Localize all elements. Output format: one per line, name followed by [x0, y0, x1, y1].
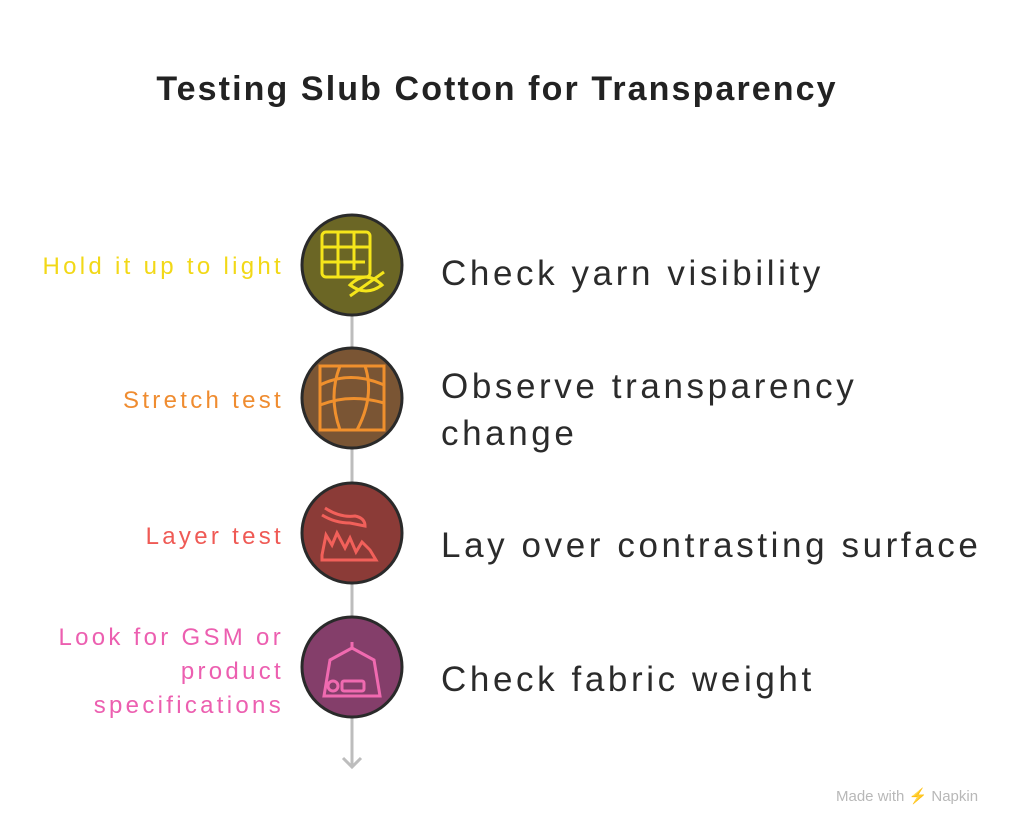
right text 1: Check yarn visibility: [441, 254, 824, 293]
icon: hand layering: [302, 483, 402, 583]
right text 2: change: [441, 414, 577, 453]
right text 2: [441, 367, 857, 453]
left label 4: product: [181, 658, 284, 685]
right text 3: Lay over contrasting surface: [441, 526, 981, 565]
icon: grid with eye: [302, 215, 402, 315]
left label 4: specifications: [94, 692, 284, 719]
left label 1: Hold it up to light: [43, 253, 284, 280]
connector line with arrow: [343, 300, 361, 767]
left label 3: Layer test: [146, 523, 284, 550]
icon: scale: [302, 617, 402, 717]
left label 4: Look for GSM or: [58, 624, 284, 651]
right text 2: Observe transparency: [441, 367, 857, 406]
title: Testing Slub Cotton for Transparency: [156, 70, 838, 108]
icon: stretched fabric: [302, 348, 402, 448]
footer credit: Made with ⚡ Napkin: [836, 788, 978, 805]
right text 4: Check fabric weight: [441, 660, 815, 699]
left label 2: Stretch test: [123, 387, 284, 414]
left label 4: [58, 624, 284, 719]
